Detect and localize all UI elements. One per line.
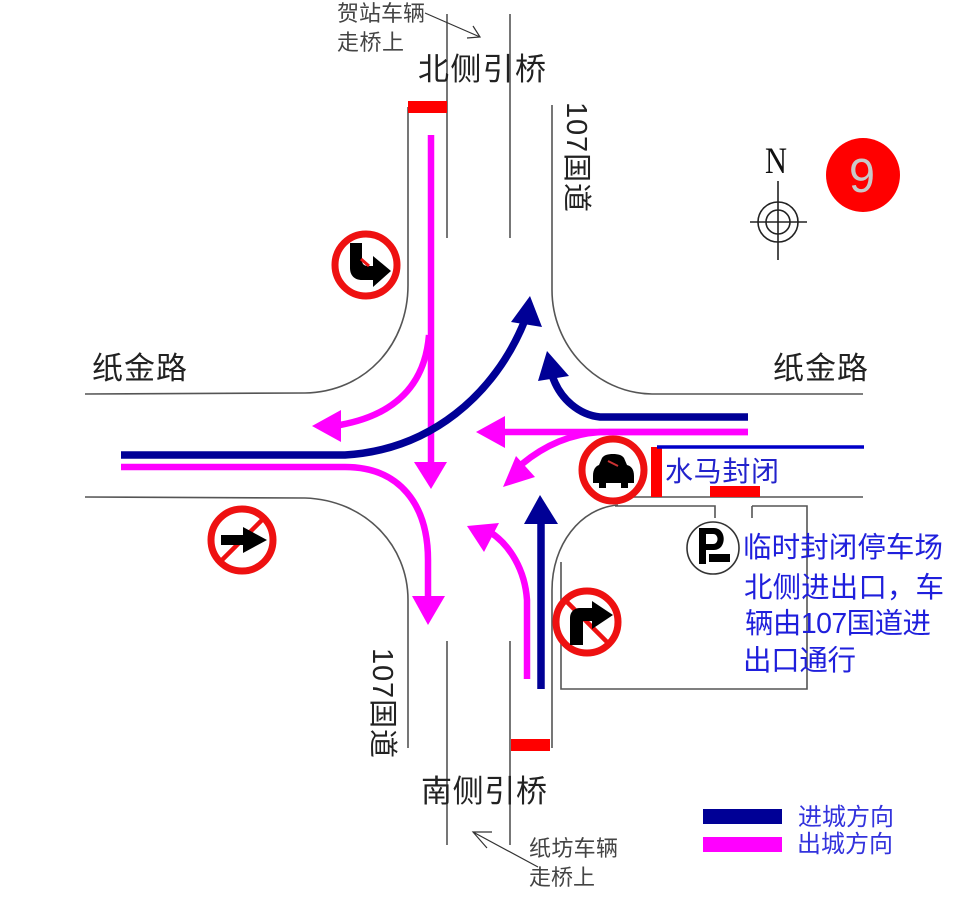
note: temporary parking closure: 出口通行 (743, 645, 856, 677)
pointer arrow: Hezhan note (425, 13, 480, 38)
legend: outbound: 出城方向 (797, 831, 893, 858)
sign: no motor vehicles (582, 439, 644, 501)
route: east straight (500, 429, 748, 435)
parking lot outline (561, 506, 807, 689)
legend: inbound (703, 804, 894, 831)
east closed lane line (657, 445, 864, 449)
route: south turning north-west (490, 532, 527, 679)
route: west to south (121, 467, 428, 600)
arrowhead: west on east road (476, 416, 505, 448)
compass letter N: N (765, 141, 787, 182)
inbound arrowheads (511, 296, 569, 524)
arrowhead: north-west on east road (538, 351, 569, 381)
label: Zhijin Road east: 纸金路 (773, 351, 868, 386)
route: north to south (428, 135, 434, 470)
legend (703, 804, 894, 858)
pointer arrow: Zhifang note (473, 832, 538, 867)
arrowhead: south on north road (414, 462, 447, 489)
sign: no U-turn style turn (335, 234, 397, 296)
note: Zhifang vehicles: 走桥上 (529, 865, 595, 890)
label: Route 107 south: 107国道 (366, 648, 399, 758)
label: Zhijin Road west: 纸金路 (92, 351, 187, 386)
arrowhead: south on south road (412, 596, 445, 625)
sign: parking (687, 522, 739, 574)
arrowhead: south-west on east road (503, 456, 535, 487)
map number badge (826, 138, 900, 212)
legend: inbound: 进城方向 (798, 804, 894, 831)
sign: no right turn (556, 591, 618, 653)
label: Route 107 north: 107国道 (560, 102, 593, 212)
map number badge: 9 (849, 150, 875, 203)
note: Zhifang vehicles: 纸坊车辆 (529, 836, 618, 861)
label: north bridge: 北侧引桥 (418, 52, 546, 87)
note: Hezhan vehicles: 走桥上 (337, 30, 404, 55)
inbound navy routes (121, 320, 748, 689)
note: temporary parking closure: 北侧进出口，车 (744, 572, 944, 604)
route: west to north (121, 320, 525, 455)
arrowhead: north (511, 296, 542, 327)
red barrier: east water barricade (651, 447, 662, 497)
note: Hezhan vehicles (337, 1, 425, 55)
note: temporary parking closure (743, 532, 944, 677)
label: water barrier closed: 水马封闭 (665, 456, 779, 487)
route: south to north (537, 520, 545, 689)
arrowhead: west (312, 410, 341, 442)
legend: outbound (703, 831, 893, 858)
note: Zhifang vehicles (529, 836, 618, 890)
red barrier: north (408, 101, 447, 113)
red barrier: south (511, 739, 550, 751)
note: temporary parking closure: 辆由107国道进 (745, 608, 931, 640)
arrowhead: north on south road (524, 495, 558, 524)
red barrier: parking entrance (710, 486, 760, 497)
compass: north marker (750, 141, 807, 260)
route: east turning north (552, 375, 748, 417)
outbound arrowheads (312, 410, 535, 625)
outbound magenta routes (121, 135, 748, 679)
note: Hezhan vehicles: 贺站车辆 (337, 1, 425, 26)
arrowhead: north-west on south road (467, 523, 499, 552)
sign: no through (211, 509, 273, 571)
note: temporary parking closure: 临时封闭停车场 (743, 532, 943, 564)
route: east turning south (522, 432, 748, 464)
road outlines (85, 14, 863, 845)
label: south bridge: 南侧引桥 (421, 774, 547, 809)
route: north turning west (340, 335, 429, 425)
